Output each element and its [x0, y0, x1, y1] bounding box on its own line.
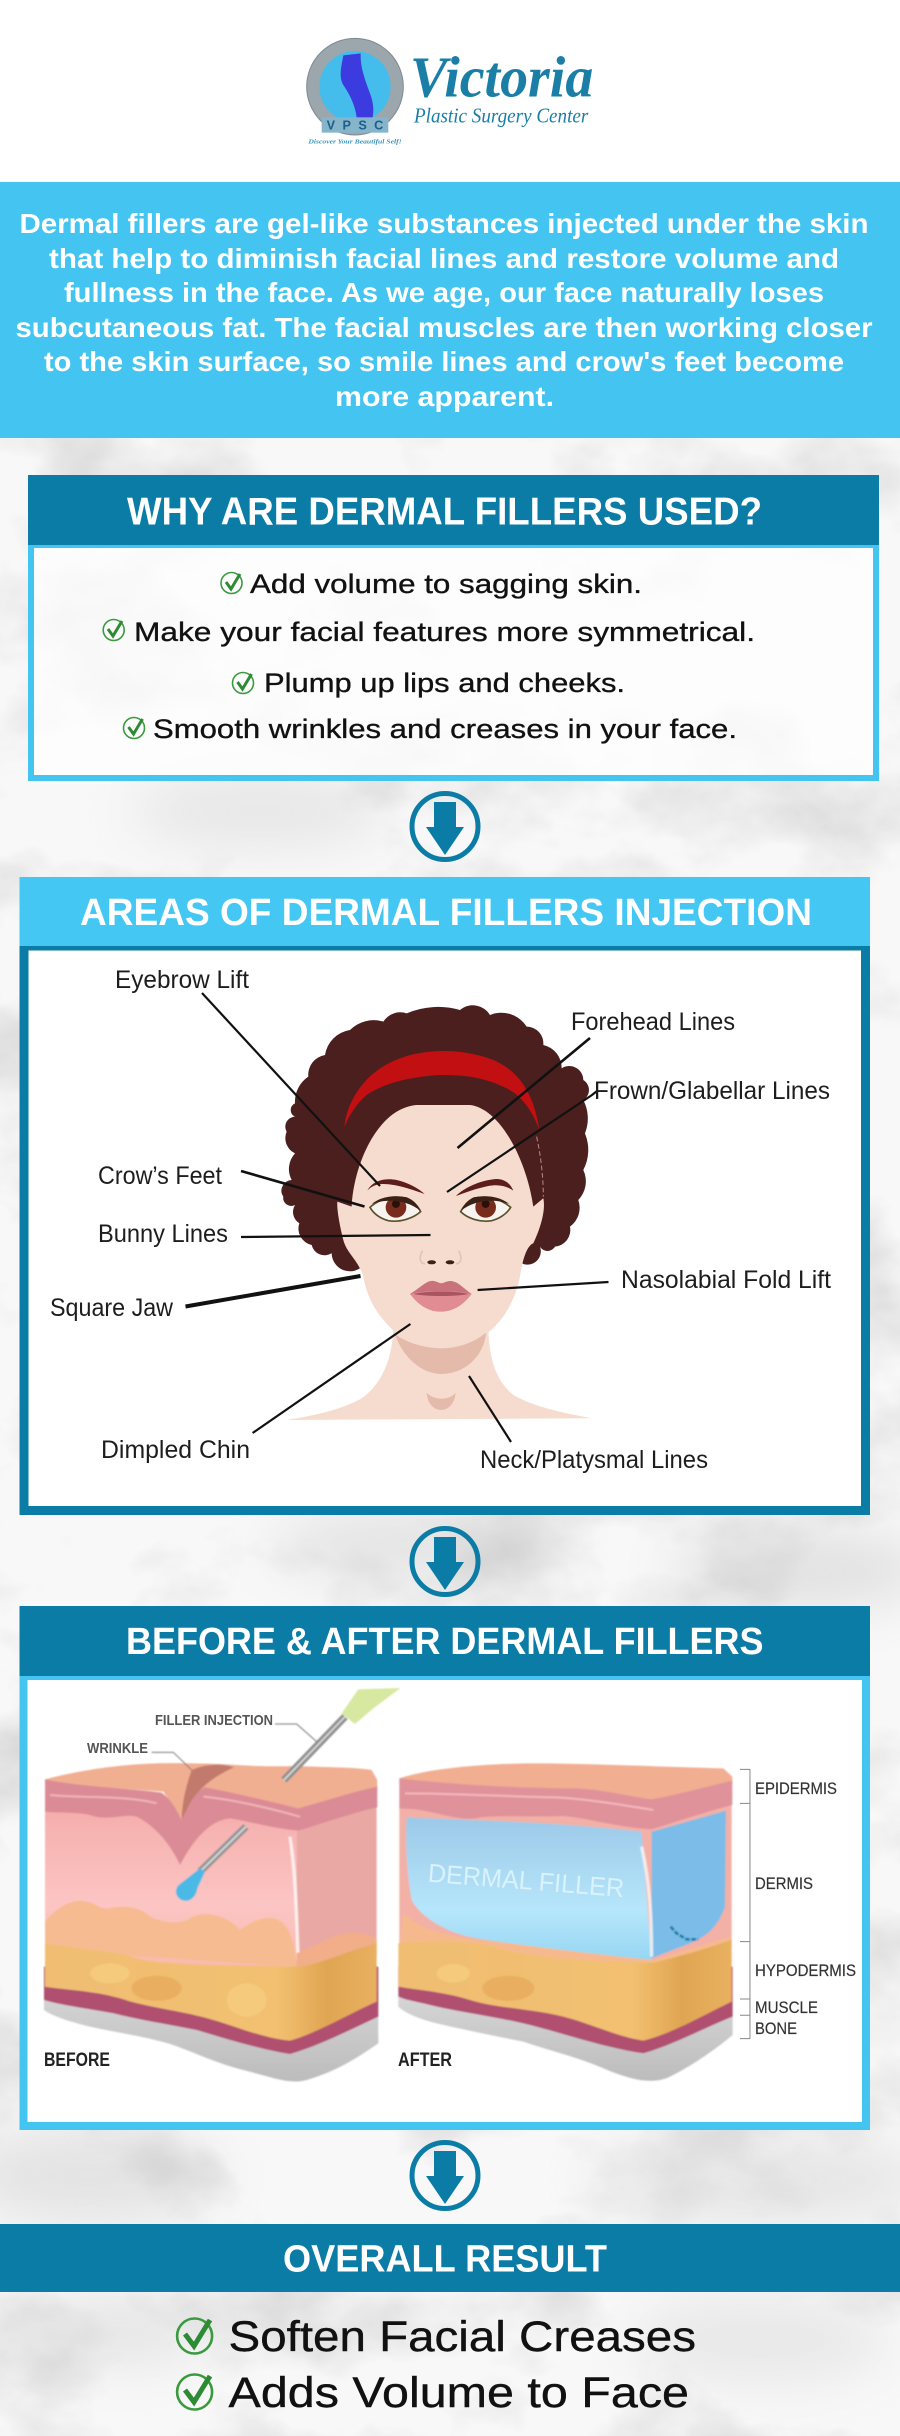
intro text: to the skin surface, so smile lines and crow's feet become	[44, 346, 844, 377]
band: overall result	[0, 2224, 900, 2292]
eyes	[370, 1197, 421, 1221]
dermal filler text: DERMAL FILLER	[427, 1858, 625, 1903]
panel: before and after	[20, 1606, 870, 2126]
muscle layer	[398, 1967, 733, 2053]
fat layer	[398, 1940, 732, 2041]
logo emblem ring: VPSC	[327, 118, 383, 132]
skin top surface	[45, 1763, 377, 1817]
lips	[410, 1281, 472, 1312]
dermis layer	[45, 1807, 297, 1970]
result list	[177, 2313, 696, 2417]
nose	[420, 1251, 461, 1264]
filler needle mark	[671, 1927, 698, 1939]
after caption: AFTER	[398, 2050, 452, 2071]
before labels: WRINKLE	[87, 1740, 148, 1757]
after labels: HYPODERMIS	[755, 1961, 856, 1980]
area labels: Square Jaw	[50, 1294, 174, 1322]
result text 1: Soften Facial Creases	[228, 2313, 696, 2361]
band: overall result: OVERALL RESULT	[283, 2238, 607, 2280]
intro text: fullness in the face. As we age, our face naturally loses	[64, 277, 824, 308]
list: why items: Smooth wrinkles and creases in your face.	[153, 714, 737, 744]
needle lower	[200, 1827, 246, 1872]
after labels	[755, 1779, 856, 2038]
arrow 2	[412, 1528, 478, 1594]
intro text: subcutaneous fat. The facial muscles are then working closer	[16, 312, 873, 343]
list: why items	[134, 569, 755, 744]
area labels	[50, 966, 831, 1474]
intro text: more apparent.	[335, 381, 554, 412]
syringe hub	[342, 1688, 401, 1724]
intro text: that help to diminish facial lines and restore volume and	[49, 243, 839, 274]
before labels	[44, 1712, 273, 2071]
area labels: Neck/Platysmal Lines	[480, 1446, 708, 1474]
icon: result check 2	[177, 2374, 212, 2410]
needle upper	[284, 1717, 345, 1780]
epidermis layer	[45, 1779, 377, 1865]
after labels: MUSCLE	[755, 1998, 818, 2017]
subcutaneous blush	[399, 1913, 730, 1973]
neck	[287, 1323, 592, 1420]
list: why items: Make your facial features more symmetrical.	[134, 617, 755, 647]
list: why items: Plump up lips and cheeks.	[264, 668, 625, 698]
list: why items: Add volume to sagging skin.	[250, 569, 642, 599]
bone layer	[398, 1997, 733, 2081]
before labels: FILLER INJECTION	[155, 1712, 273, 1729]
panel: areas of injection	[20, 877, 870, 1510]
bone layer	[44, 1990, 378, 2081]
panel: why are dermal fillers used	[28, 475, 879, 778]
after labels: DERMIS	[755, 1874, 813, 1893]
arrow 3	[412, 2142, 478, 2208]
muscle layer	[44, 1967, 378, 2054]
intro text: Dermal fillers are gel-like substances injected under the skin	[20, 208, 869, 239]
epidermis layer	[399, 1778, 732, 1829]
headband	[344, 1051, 539, 1130]
after labels: EPIDERMIS	[755, 1779, 837, 1798]
hair	[281, 1005, 589, 1271]
after labels: BONE	[755, 2019, 797, 2038]
before skin diagram	[44, 1688, 401, 2081]
subcutaneous scallops	[45, 1901, 297, 1967]
bracket	[740, 1769, 750, 2039]
leader lines	[186, 993, 608, 1442]
before labels: BEFORE	[44, 2050, 110, 2071]
intro text	[16, 208, 873, 412]
result text 2: Adds Volume to Face	[228, 2369, 689, 2417]
eyebrows	[367, 1179, 425, 1194]
logo emblem ring	[307, 38, 403, 135]
logo subtitle: Plastic Surgery Center	[413, 106, 589, 128]
heading: areas: AREAS OF DERMAL FILLERS INJECTION	[80, 892, 812, 934]
logo wordmark: Victoria	[410, 45, 593, 110]
area labels: Frown/Glabellar Lines	[594, 1077, 830, 1105]
filler droplet	[176, 1868, 205, 1901]
area labels: Dimpled Chin	[101, 1436, 250, 1464]
icon: result check 1	[177, 2318, 212, 2354]
icon: check marks	[103, 572, 254, 738]
area labels: Crow’s Feet	[98, 1162, 222, 1190]
fat layer	[45, 1943, 377, 2041]
heading: why: WHY ARE DERMAL FILLERS USED?	[127, 490, 762, 534]
logo tagline: Discover Your Beautiful Self!	[307, 138, 402, 145]
filler front face	[406, 1817, 652, 1960]
heading: before and after: BEFORE & AFTER DERMAL FILLERS	[126, 1621, 764, 1663]
dermis frame	[399, 1803, 732, 1967]
filler side face	[652, 1811, 726, 1958]
intro band	[0, 182, 900, 438]
neck shadow	[395, 1333, 486, 1374]
arrow 1	[412, 794, 478, 860]
area labels: Bunny Lines	[98, 1220, 228, 1248]
face illustration	[281, 1005, 592, 1420]
after skin diagram	[398, 1763, 750, 2081]
area labels: Forehead Lines	[571, 1008, 735, 1036]
skin top surface	[399, 1763, 732, 1803]
logo	[307, 38, 593, 145]
area labels: Nasolabial Fold Lift	[621, 1266, 831, 1294]
area labels: Eyebrow Lift	[115, 966, 249, 994]
face skin	[337, 1105, 544, 1348]
